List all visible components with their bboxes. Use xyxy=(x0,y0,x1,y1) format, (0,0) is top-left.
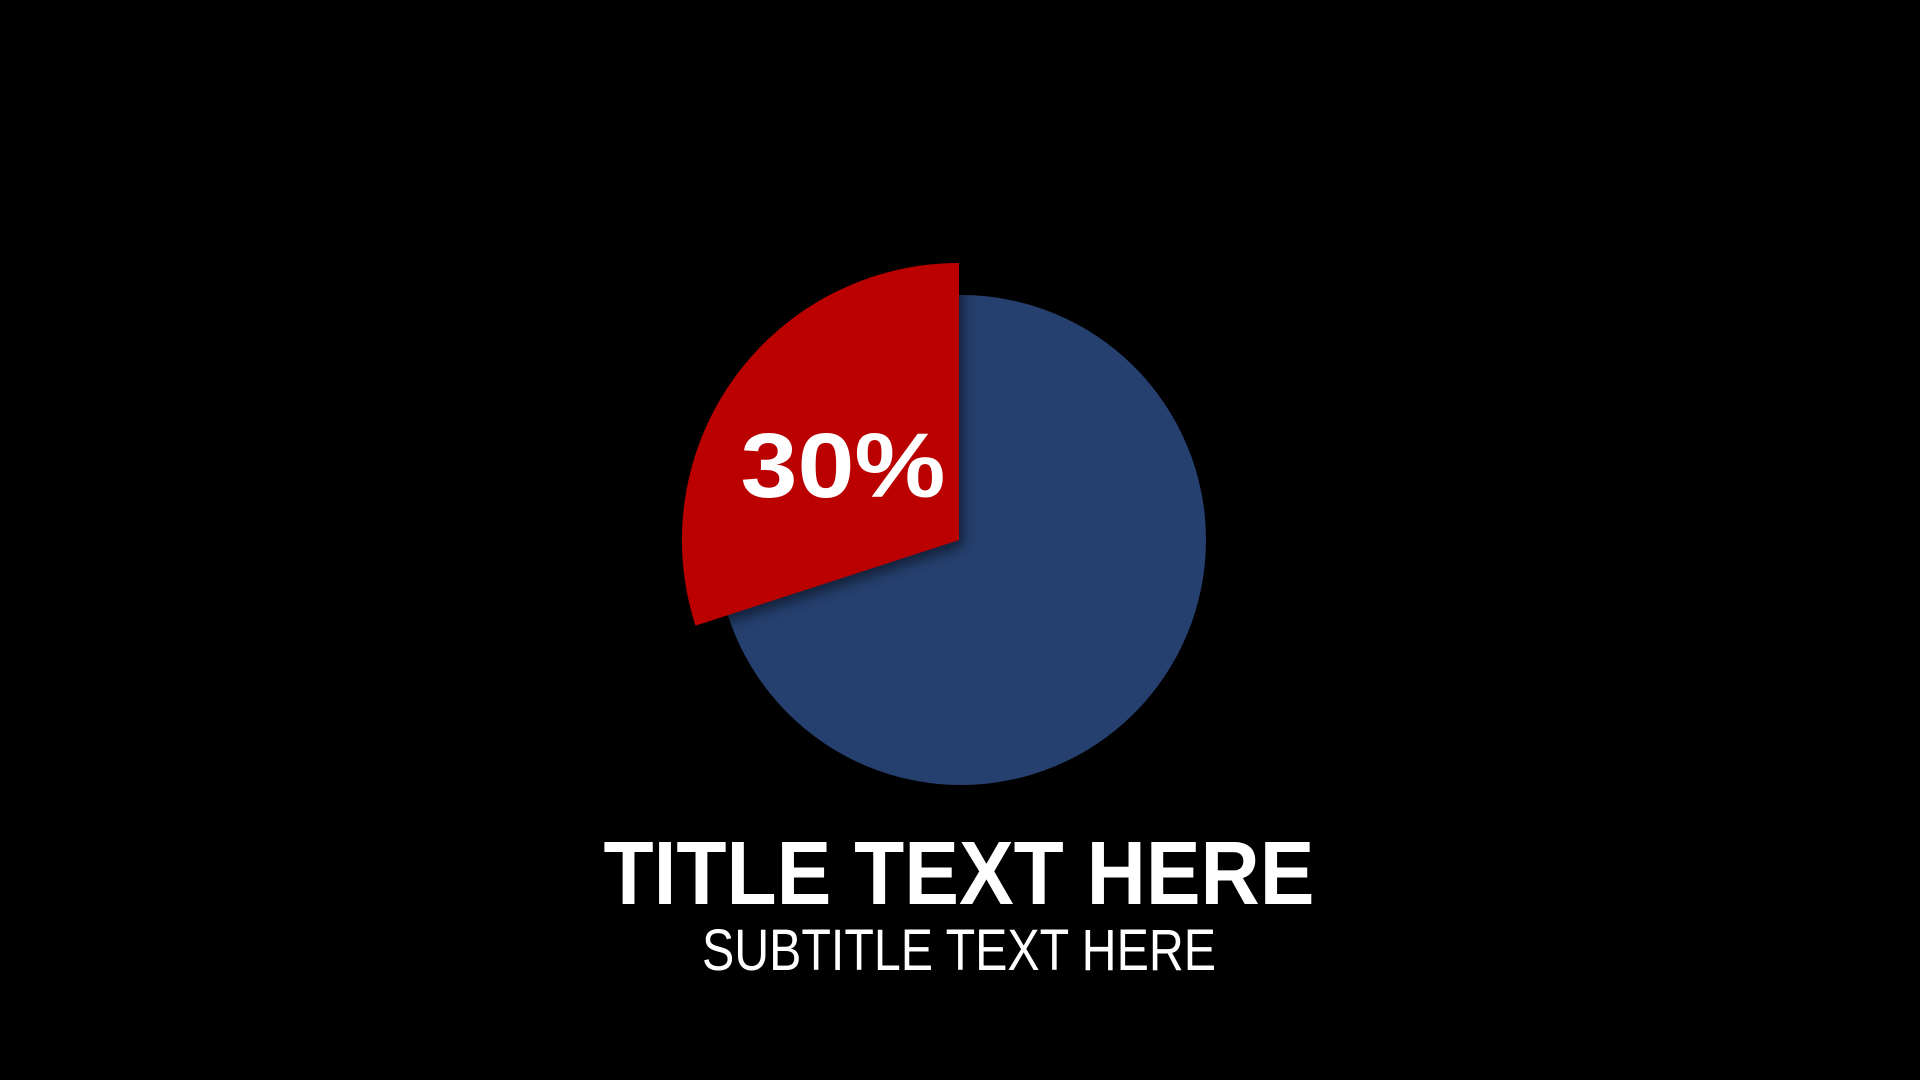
subtitle: SUBTITLE TEXT HERE xyxy=(702,918,1216,983)
title: TITLE TEXT HERE xyxy=(604,824,1314,924)
pie: red 30% exploded slice xyxy=(682,263,959,626)
percentage label: 30% xyxy=(740,415,946,517)
pie: blue 70% slice xyxy=(716,295,1206,785)
